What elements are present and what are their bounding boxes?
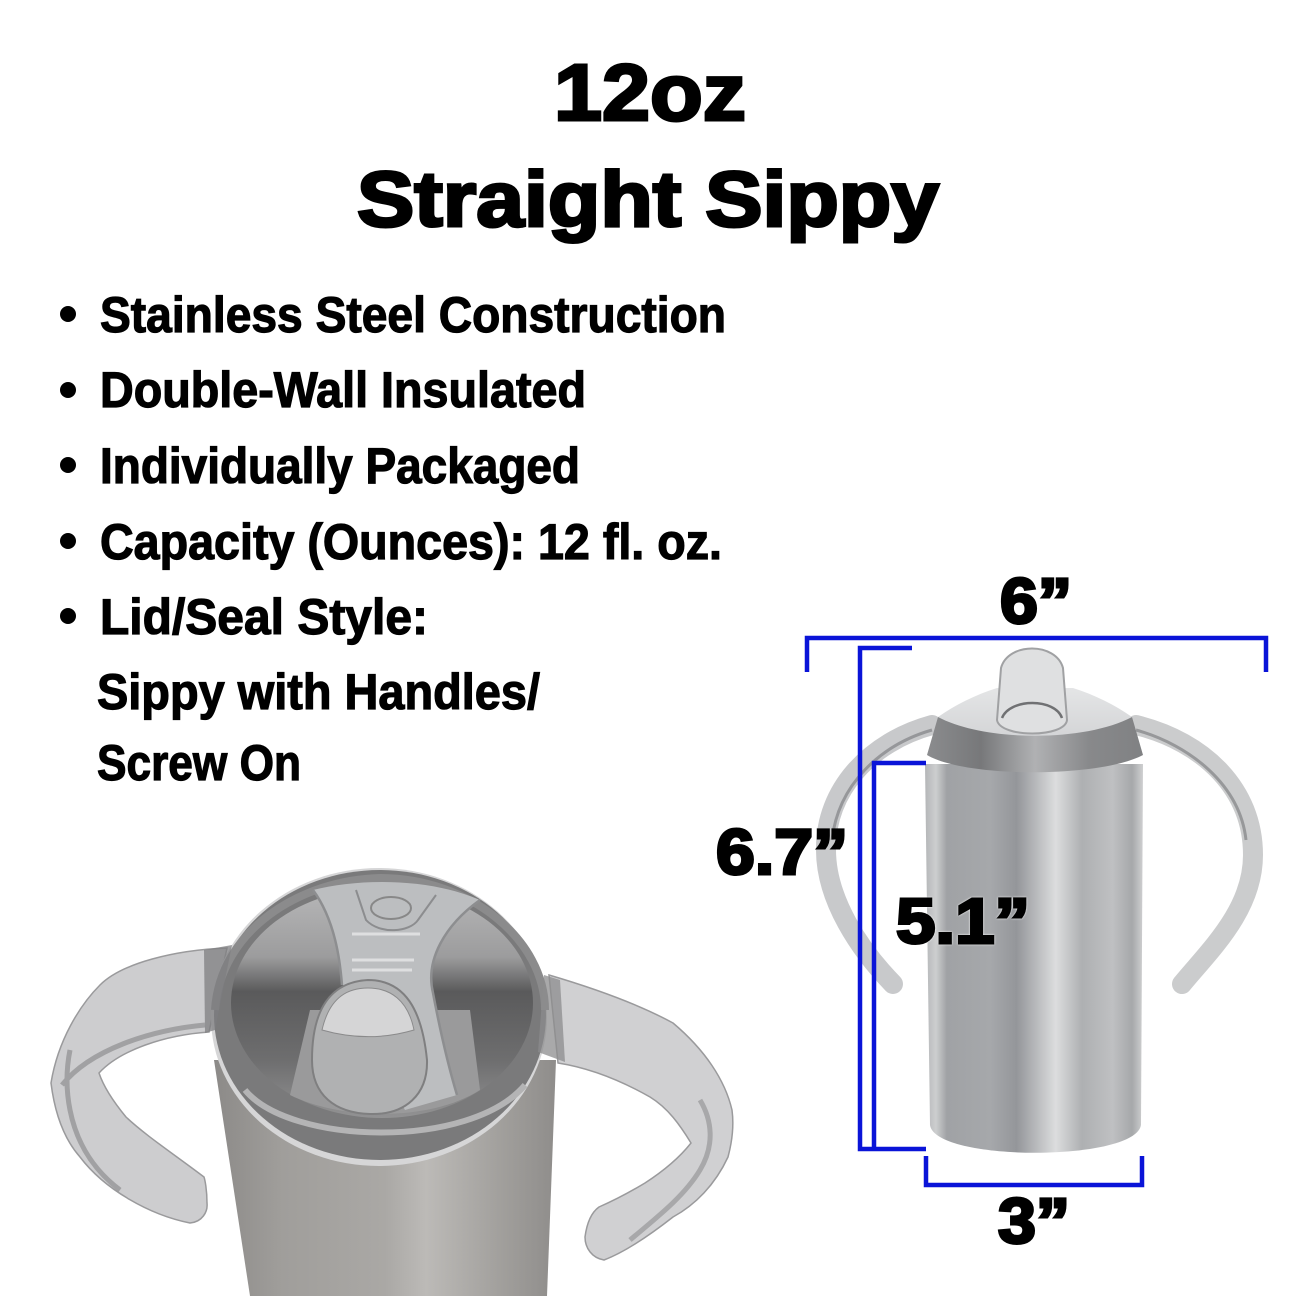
- left handle grooves: [62, 1025, 205, 1190]
- right handle grooves: [630, 1100, 710, 1240]
- strip edge lines: [313, 890, 480, 1095]
- feature bullet list: Lid/Seal Style:: [100, 589, 428, 645]
- feature bullet list: Capacity (Ounces): 12 fl. oz.: [100, 514, 722, 570]
- lid outer edge: [211, 868, 547, 1166]
- blue dimension brackets: [807, 638, 1266, 1185]
- spout: [997, 648, 1067, 734]
- rim highlight: [245, 1085, 525, 1132]
- feature bullet list: [60, 287, 726, 791]
- rim dark top: [215, 878, 545, 1010]
- title: Straight Sippy: [357, 155, 939, 243]
- dimension: base width: 3”: [998, 1185, 1070, 1257]
- feature bullet list: Individually Packaged: [100, 438, 580, 494]
- handle joints: [204, 945, 232, 1033]
- steel body: [214, 1060, 556, 1296]
- feature bullet list: Stainless Steel Construction: [100, 287, 726, 343]
- handles: [826, 725, 932, 984]
- spout top slots: [322, 988, 414, 1037]
- feature bullet list: Screw On: [97, 735, 301, 791]
- title: [357, 48, 939, 243]
- lid clear strip: [313, 882, 480, 1110]
- photo: sippy cup seen from above: [51, 868, 733, 1296]
- right handle: [549, 975, 733, 1260]
- dimension: overall height: 6.7”: [716, 816, 848, 888]
- lid band: [927, 717, 1143, 772]
- full height bracket: [860, 648, 926, 1149]
- dimension: overall width: 6”: [1000, 565, 1072, 637]
- feature bullet list: Double-Wall Insulated: [100, 362, 586, 418]
- dimension: body height: 5.1”: [896, 885, 1030, 957]
- lid vent: [356, 890, 436, 930]
- spout: [312, 980, 427, 1114]
- base width bracket: [926, 1156, 1142, 1185]
- spout inner shadow: [1002, 703, 1062, 718]
- lower window lighter area: [290, 1010, 480, 1114]
- lid window: [231, 888, 533, 1118]
- strip ribs: [352, 934, 420, 970]
- body: [925, 764, 1143, 1153]
- dome lid: [934, 688, 1136, 742]
- feature bullet list: Sippy with Handles/: [97, 664, 540, 720]
- body height bracket: [874, 763, 926, 1149]
- left handle: [51, 948, 227, 1223]
- photo: sippy cup side view: [826, 648, 1253, 1153]
- handle shading: [832, 730, 1246, 840]
- width bracket: [807, 638, 1266, 672]
- lid rim: [214, 870, 546, 1160]
- title: 12oz: [554, 48, 746, 137]
